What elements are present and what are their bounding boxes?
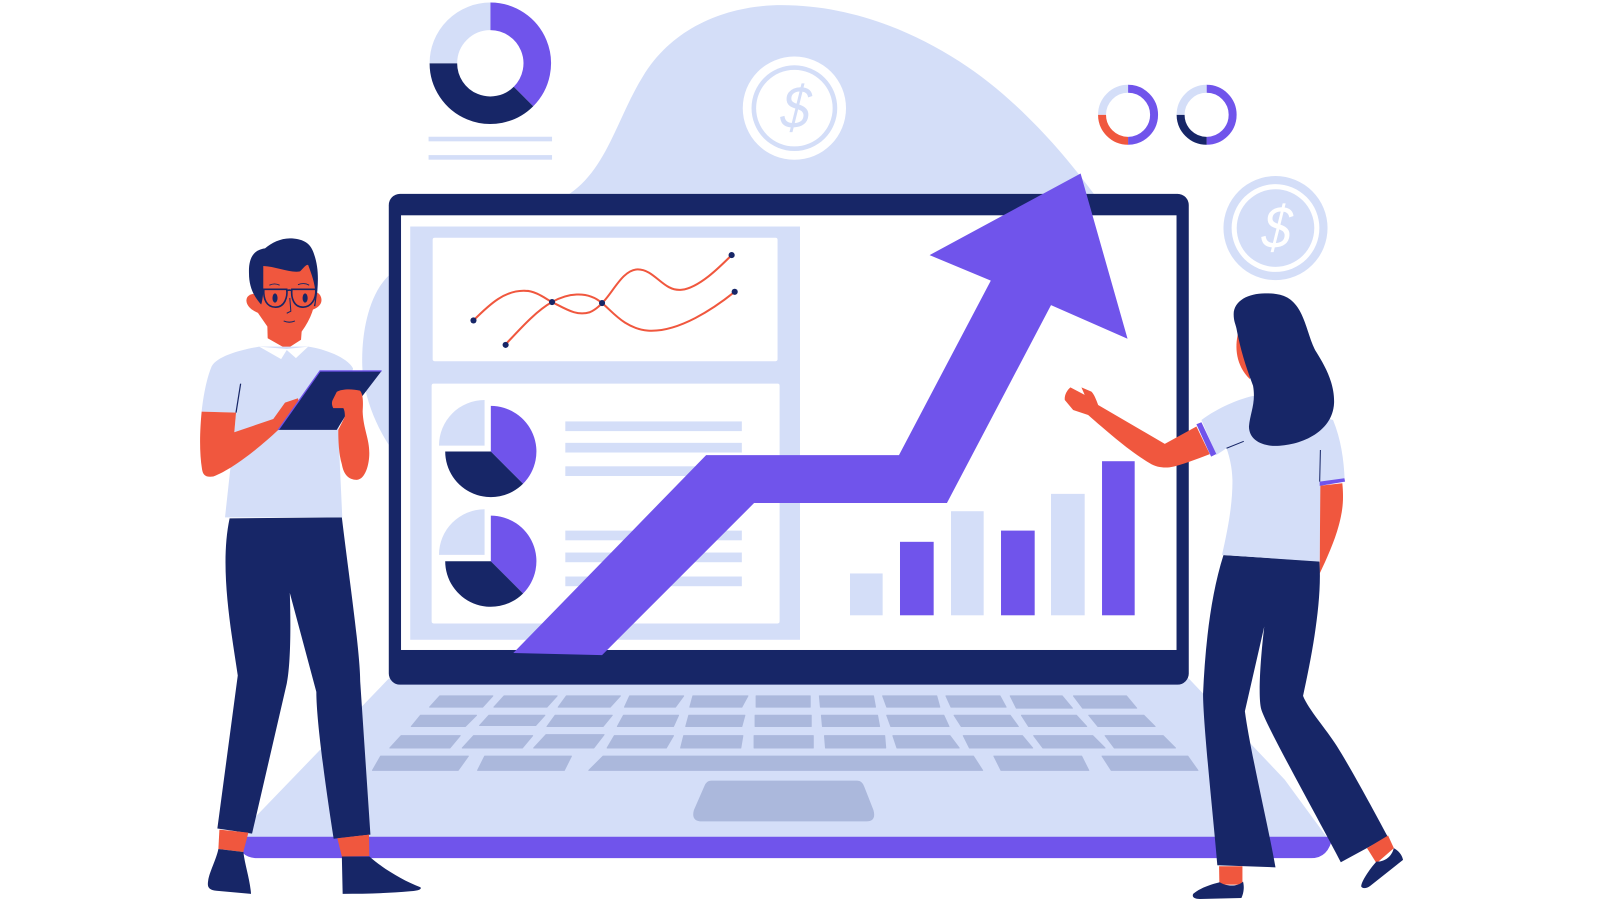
donut chart large <box>443 16 537 110</box>
coin right <box>1223 176 1328 280</box>
small donut navy <box>1181 89 1233 141</box>
woman hair <box>1234 293 1334 446</box>
panel: pie charts <box>432 384 780 623</box>
screen <box>401 215 1177 650</box>
laptop base <box>245 679 1331 842</box>
donut caption lines <box>429 137 552 160</box>
man right arm <box>200 398 302 477</box>
keyboard <box>372 696 1198 770</box>
woman pants <box>1203 555 1388 867</box>
man eyes <box>272 293 308 303</box>
woman socks <box>1219 835 1394 885</box>
man socks <box>218 830 369 857</box>
man face <box>258 265 315 349</box>
background blob <box>569 5 1094 194</box>
panel: line chart <box>433 238 778 361</box>
man ears <box>246 292 321 314</box>
tablet <box>278 371 382 430</box>
woman back arm <box>1320 483 1343 573</box>
dashboard left panel <box>410 227 800 640</box>
woman face sliver <box>1236 327 1255 379</box>
woman figure <box>1065 293 1403 899</box>
woman shoes <box>1193 848 1403 899</box>
small donut orange <box>1102 89 1154 141</box>
woman pointing arm <box>1065 387 1210 467</box>
woman shirt seams <box>1227 441 1320 482</box>
man hair <box>249 238 318 306</box>
bar chart <box>850 461 1135 615</box>
laptop screen bezel <box>389 194 1189 685</box>
man left arm and hand <box>332 389 369 480</box>
man shoes <box>208 849 421 894</box>
woman shirt <box>1201 396 1345 562</box>
man figure <box>200 238 421 894</box>
coin top: $ <box>778 75 815 142</box>
coin top <box>743 57 846 160</box>
man glasses <box>264 284 316 322</box>
trackpad <box>693 781 874 821</box>
man collar <box>259 347 308 359</box>
coin right: $ <box>1259 195 1296 262</box>
growth arrow <box>513 173 1128 655</box>
man sleeve seam <box>236 384 241 413</box>
woman sleeve cuffs <box>1196 422 1345 486</box>
background blob left <box>362 276 389 445</box>
laptop front bar <box>243 837 1333 858</box>
man shirt <box>202 347 353 517</box>
man pants <box>217 517 370 839</box>
